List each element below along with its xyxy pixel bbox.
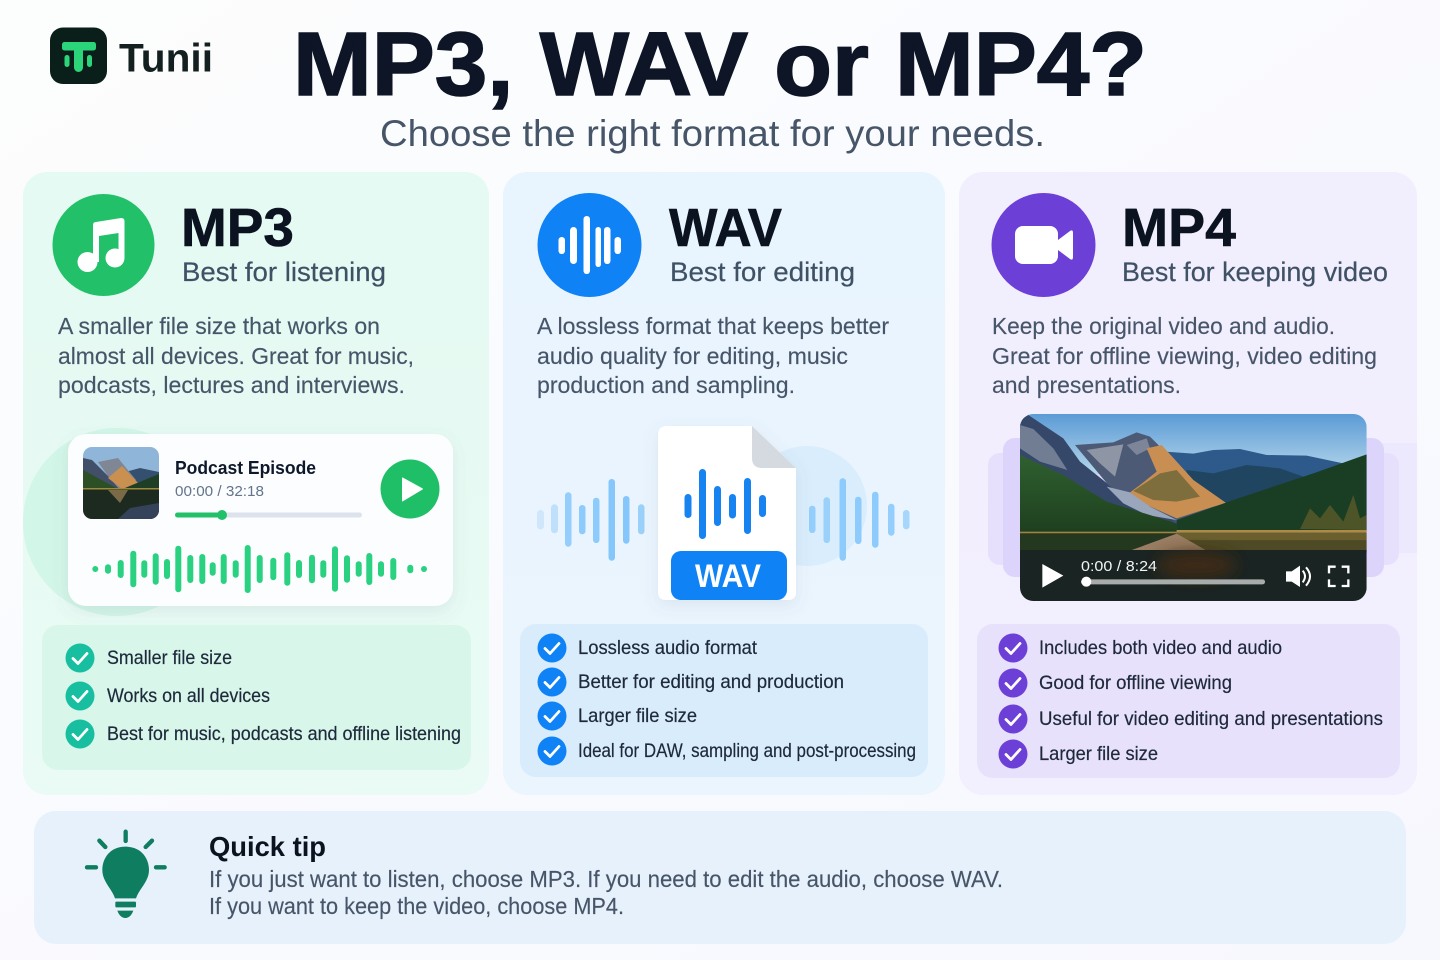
episode time: 00:00 / 32:18 xyxy=(175,483,264,500)
panel: quick tip xyxy=(34,811,1406,944)
control bar xyxy=(1020,550,1367,601)
feature: best for music: Best for music, podcasts and offline listening xyxy=(107,723,461,745)
subtitle: Choose the right format for your needs. xyxy=(380,113,1045,154)
panel: MP3 xyxy=(23,172,489,795)
illustration: video player xyxy=(988,414,1430,601)
description: MP4: Keep the original video and audio. xyxy=(992,313,1335,339)
feature: video editing: Useful for video editing and presentations xyxy=(1039,708,1383,730)
title: MP3, WAV or MP4? xyxy=(293,15,1147,115)
waveform left xyxy=(537,479,644,561)
play xyxy=(1042,564,1063,588)
orange slope xyxy=(1130,445,1227,518)
icon: sound wave xyxy=(538,193,642,297)
tip text: If you want to keep the video, choose MP4. xyxy=(209,893,624,919)
document fold xyxy=(752,426,796,468)
feature: smaller file size xyxy=(66,644,232,672)
waveform on file xyxy=(684,469,766,539)
sky xyxy=(1020,414,1367,474)
feature: smaller file size: Smaller file size xyxy=(107,647,232,669)
waveform xyxy=(92,545,427,593)
episode title: Podcast Episode xyxy=(175,457,316,478)
panel: MP4 xyxy=(959,172,1430,795)
video time: 0:00 / 8:24 xyxy=(1081,558,1157,575)
left hill xyxy=(1020,455,1177,533)
icon: light bulb xyxy=(87,832,165,918)
feature: ideal for DAW: Ideal for DAW, sampling and post-processing xyxy=(578,740,916,762)
feature list: WAV xyxy=(520,624,928,777)
feature: offline viewing: Good for offline viewing xyxy=(1039,672,1232,694)
tip text: If you just want to listen, choose MP3. If you need to edit the audio, choose WAV. xyxy=(209,866,1003,892)
peak xyxy=(1075,432,1227,522)
subheading: best for keeping video: Best for keeping video xyxy=(1122,257,1388,287)
description: WAV: production and sampling. xyxy=(537,372,795,398)
album cover xyxy=(83,447,159,520)
description: MP3 xyxy=(58,313,414,398)
volume xyxy=(1286,566,1300,587)
far mountains xyxy=(1165,449,1367,532)
scrubber xyxy=(1081,579,1265,584)
description: WAV: A lossless format that keeps better xyxy=(537,313,889,339)
logo wordmark: Tunii xyxy=(119,36,213,80)
feature: lossless: Lossless audio format xyxy=(578,637,758,659)
feature: video and audio: Includes both video and audio xyxy=(1039,637,1282,659)
play button xyxy=(380,460,440,518)
feature: works on all devices: Works on all devices xyxy=(107,685,270,707)
WAV badge: WAV xyxy=(695,558,762,594)
waveform right xyxy=(809,478,910,561)
feature: better for editing: Better for editing and production xyxy=(578,671,844,693)
subheading: best for listening: Best for listening xyxy=(182,257,386,287)
description: WAV: audio quality for editing, music xyxy=(537,343,848,369)
feature: video editing xyxy=(998,704,1383,734)
logo: Tunii xyxy=(50,28,213,84)
pale scree xyxy=(1107,487,1177,520)
description: MP3: podcasts, lectures and interviews. xyxy=(58,372,405,398)
feature: works on all devices xyxy=(66,682,270,710)
icon: music note xyxy=(52,194,154,296)
panel: WAV xyxy=(503,172,945,795)
illustration: WAV file with waveforms xyxy=(537,426,910,600)
description: MP4: and presentations. xyxy=(992,372,1181,398)
heading: MP4: MP4 xyxy=(1122,198,1236,258)
document xyxy=(658,426,796,600)
feature list: MP3 xyxy=(42,625,471,770)
fullscreen xyxy=(1329,567,1348,586)
tip text xyxy=(209,866,1003,919)
feature: ideal for DAW xyxy=(538,736,916,766)
description: MP3: almost all devices. Great for music, xyxy=(58,343,414,369)
right forest xyxy=(1177,454,1367,532)
feature: larger file size xyxy=(998,740,1158,768)
feature: better for editing xyxy=(538,668,844,696)
icon: video camera xyxy=(992,193,1096,297)
subheading: best for editing: Best for editing xyxy=(670,257,855,287)
shoreline xyxy=(1020,532,1177,533)
feature list: MP4 xyxy=(977,624,1400,778)
description: MP4 xyxy=(992,313,1377,398)
heading: MP3: MP3 xyxy=(181,198,294,258)
description: WAV xyxy=(537,313,889,398)
feature: larger file size: Larger file size xyxy=(1039,743,1158,765)
feature: lossless xyxy=(538,634,758,662)
progress bar xyxy=(175,510,362,520)
left ridge xyxy=(1020,415,1177,522)
heading: WAV: WAV xyxy=(669,198,782,258)
feature: video and audio xyxy=(998,634,1282,662)
feature: offline viewing xyxy=(998,668,1232,698)
illustration: audio player xyxy=(23,428,453,616)
feature: larger file size: Larger file size xyxy=(578,705,697,727)
description: MP4: Great for offline viewing, video editing xyxy=(992,343,1377,369)
icon: Tunii mark xyxy=(50,28,107,84)
WAV badge xyxy=(671,551,787,600)
feature: best for music xyxy=(66,720,461,748)
lake xyxy=(1020,533,1367,553)
tip heading: Quick tip xyxy=(209,831,326,862)
description: MP3: A smaller file size that works on xyxy=(58,313,380,339)
feature: larger file size xyxy=(538,702,697,730)
